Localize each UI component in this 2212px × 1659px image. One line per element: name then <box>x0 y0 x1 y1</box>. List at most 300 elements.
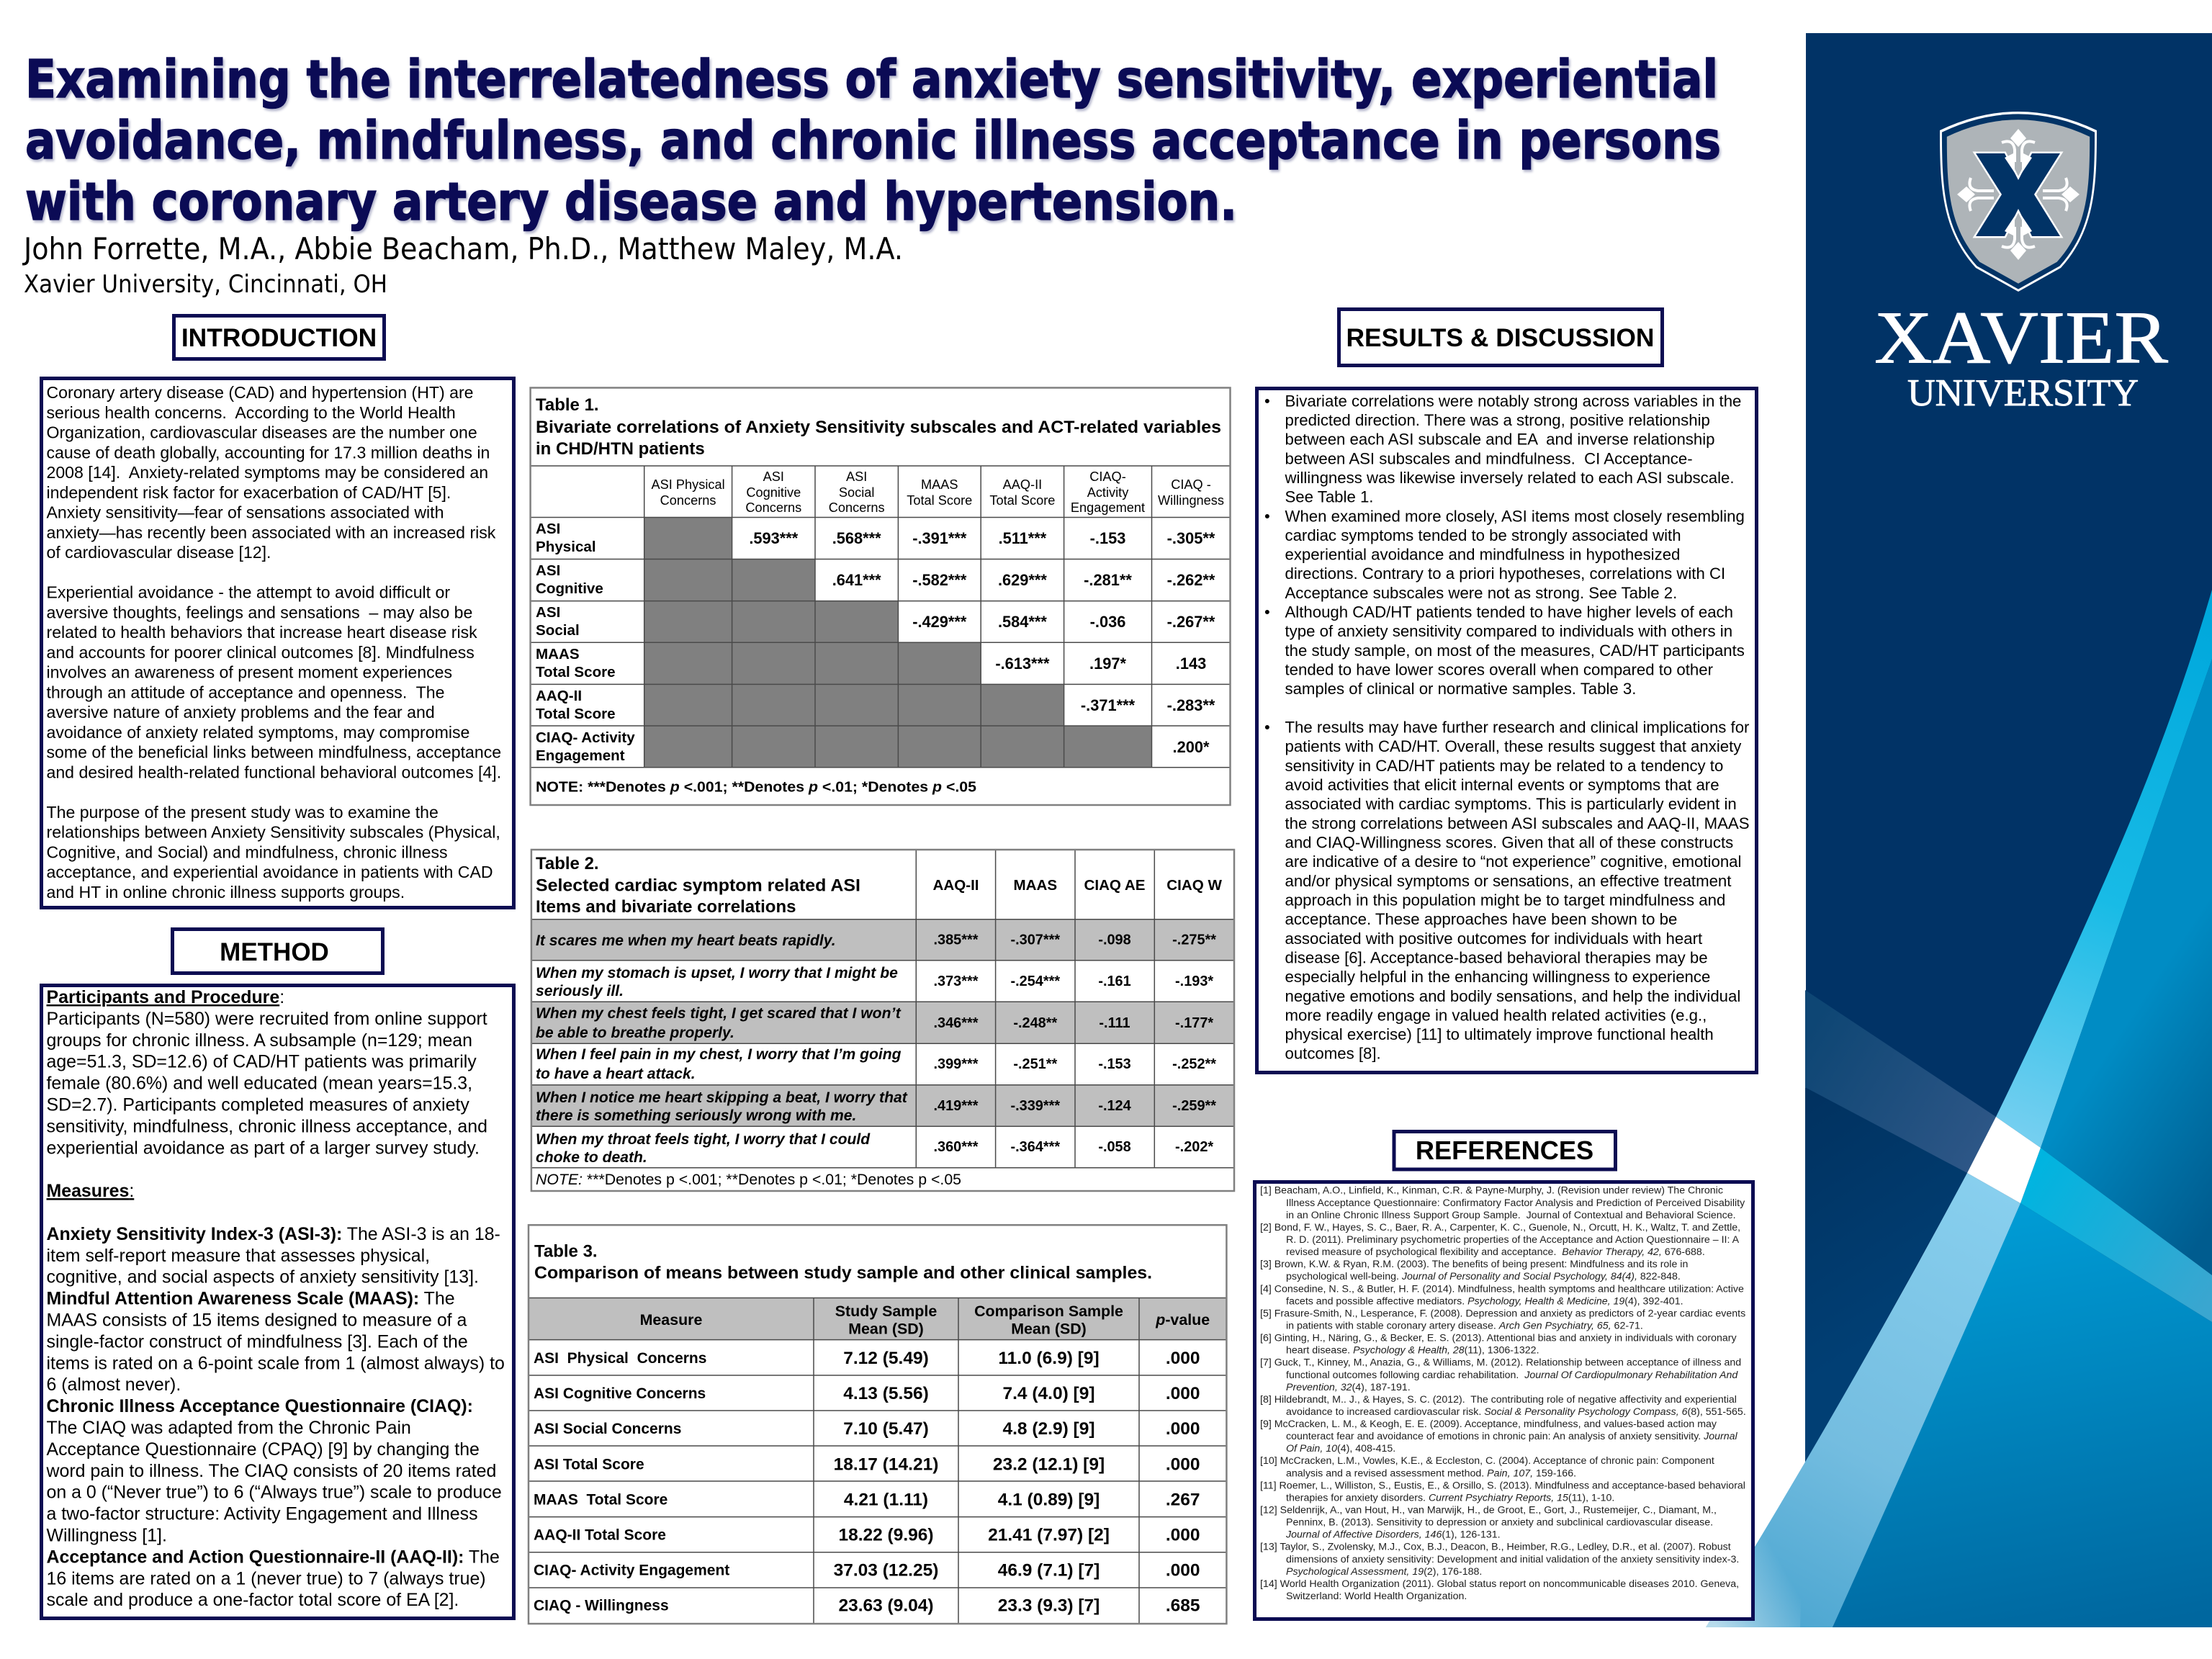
table 3 values <box>834 1349 1200 1616</box>
title: Examining the interrelatedness of anxiety sensitivity, experiential <box>25 49 1718 109</box>
panel: references: [11] Roemer, L., Williston, S., Eustis, E., & Orsillo, S. (2013). Mindfulness and acceptance-based behavioral <box>1260 1480 1745 1491</box>
table 3 values: 18.17 (14.21) <box>834 1455 938 1474</box>
table 1 row labels: Cognitive <box>536 580 603 597</box>
table 3 values: .267 <box>1166 1491 1200 1509</box>
panel: references: [9] McCracken, L. M., & Keogh, E. E. (2009). Acceptance, mindfulness, and values-based action may <box>1260 1419 1717 1430</box>
table 3 row labels: ASI Physical Concerns <box>534 1350 706 1367</box>
panel: results and discussion: • <box>1264 603 1270 621</box>
panel: results and discussion: tended to have lower scores overall when compared to other <box>1285 661 1714 679</box>
table 3 row labels: CIAQ - Willingness <box>534 1598 669 1614</box>
table 3 column headers: Study Sample <box>835 1303 937 1320</box>
panel: results and discussion: are indicative of a desire to “not experience” cognitive, emotional <box>1285 853 1741 871</box>
table 1 values: -.391*** <box>912 529 967 547</box>
table 1 values: .584*** <box>998 613 1047 631</box>
table 1 values: -.281** <box>1084 571 1132 589</box>
panel: method: Mindful Attention Awareness Scale (MAAS): <box>46 1289 419 1309</box>
table 2 title <box>536 854 860 917</box>
table 3 column headers: Mean (SD) <box>848 1321 924 1338</box>
table 1 values: .593*** <box>749 529 799 547</box>
table 1 note: NOTE: ***Denotes p <.001; **Denotes p <.01; *Denotes p <.05 <box>536 779 976 795</box>
panel: results and discussion: When examined more closely, ASI items most closely resembling <box>1285 507 1745 525</box>
table 1 values: -.305** <box>1167 529 1215 547</box>
table 2 column headers: CIAQ AE <box>1084 877 1146 894</box>
panel: results and discussion: Although CAD/HT patients tended to have higher levels of each <box>1285 603 1733 621</box>
heading: introduction: INTRODUCTION <box>181 323 377 352</box>
panel: method: Participants (N=580) were recruited from online support <box>46 1009 487 1029</box>
table 3 title: Table 3. <box>534 1241 598 1262</box>
panel: results and discussion: type of anxiety sensitivity compared to individuals with others in <box>1285 622 1732 640</box>
table 2 values: -.252** <box>1172 1056 1216 1072</box>
table 3 values: .000 <box>1166 1525 1200 1545</box>
panel: method: Acceptance and Action Questionnaire-II (AAQ-II): <box>46 1547 464 1567</box>
panel: results and discussion: experiential avoidance and mindfulness in hypothesized <box>1285 546 1680 564</box>
panel: references: [13] Taylor, S., Zvolensky, M.J., Cox, B.J., Deacon, B., Heimber, R.G., Ledley, D.R., et al. (2007). Robust <box>1260 1542 1731 1553</box>
table 1 values <box>749 529 1215 756</box>
table 3 values: 46.9 (7.1) [7] <box>998 1561 1100 1581</box>
panel: results and discussion: more readily engage in valued health related activities (e.g., <box>1285 1006 1707 1024</box>
table 3 values: 7.4 (4.0) [9] <box>1002 1384 1094 1403</box>
table 3 row labels: AAQ-II Total Score <box>534 1527 666 1544</box>
table 3 values: 23.2 (12.1) [9] <box>993 1455 1105 1474</box>
logo wordmark: XAVIER: XAVIER <box>1874 297 2169 379</box>
panel: references: [12] Seldenrijk, A., van Hout, H., van Marwijk, H., de Groot, E., Gort, J., Rustemeijer, C., Diamant, M., <box>1260 1505 1717 1516</box>
table 1 column headers: Social <box>839 485 874 500</box>
table 1 values: .568*** <box>832 529 881 547</box>
panel: method: 16 items are rated on a 1 (never true) to 7 (always true) <box>46 1568 486 1588</box>
panel: results and discussion: especially helpful in the enhancing willingness to experience <box>1285 968 1710 986</box>
panel: introduction: acceptance, and experiential avoidance in patients with CAD <box>46 863 493 881</box>
table 3 values: 11.0 (6.9) [9] <box>998 1349 1100 1368</box>
table 1 column headers: Concerns <box>745 500 801 515</box>
table 2 values: -.364*** <box>1011 1139 1060 1155</box>
table 3 values: 7.10 (5.47) <box>843 1419 929 1439</box>
heading: method <box>173 929 383 974</box>
panel: references: functional outcomes following cardiac rehabilitation. Journal Of Cardiopulmonary Rehabilitation And <box>1286 1370 1737 1381</box>
table 2 column headers: MAAS <box>1013 877 1057 894</box>
table 1 values: -.429*** <box>912 613 967 631</box>
table 1 row labels: Social <box>536 622 580 639</box>
panel: method: The <box>464 1547 500 1567</box>
table 2 title: Selected cardiac symptom related ASI <box>536 876 860 896</box>
panel: results and discussion: negative emotions and bodily sensations, and help the individual <box>1285 987 1740 1005</box>
table 2 column headers <box>932 877 1222 894</box>
panel: introduction: The purpose of the present study was to examine the <box>46 803 439 822</box>
panel: references: revised measure of psychological flexibility and acceptance. Behavior Therapy, 42, 676-688. <box>1286 1246 1705 1258</box>
authors: John Forrette, M.A., Abbie Beacham, Ph.D., Matthew Maley, M.A. <box>22 231 903 266</box>
table 1 column headers: Willingness <box>1158 493 1224 508</box>
panel: results and discussion: the strong correlations between ASI subscales and AAQ-II, MAAS <box>1285 814 1750 832</box>
panel: results and discussion: patients with CAD/HT. Overall, these results suggest that anxiety <box>1285 737 1742 755</box>
panel: results and discussion: cardiac symptoms tended to be strongly associated with <box>1285 526 1681 544</box>
panel: introduction: and accounts for poorer clinical outcomes [8]. Mindfulness <box>46 643 475 662</box>
panel: references: [6] Ginting, H., Näring, G., & Becker, E. S. (2013). Attentional bias and anxiety in individuals with coronary <box>1260 1333 1737 1344</box>
panel: method: The <box>419 1289 455 1309</box>
table 1 values: -.262** <box>1167 571 1215 589</box>
panel: references: Penninx, B. (2013). Sensitivity to depression or anxiety and subclinical cardiovascular disease. <box>1286 1517 1713 1529</box>
panel: references: dimensions of anxiety sensitivity: Development and initial validation of the anxiety sensitivity index-3. <box>1286 1554 1739 1565</box>
panel: references: [4] Consedine, N. S., & Butler, H. F. (2014). Mindfulness, health symptoms and healthcare utilization: Active <box>1260 1283 1744 1295</box>
table 3 values: 23.63 (9.04) <box>838 1596 934 1616</box>
panel: results and discussion: associated with positive outcomes for individuals with heart <box>1285 930 1702 948</box>
table 1 row labels: Total Score <box>536 664 616 680</box>
panel: method: experiential avoidance as part of a larger survey study. <box>46 1138 480 1158</box>
panel: references: R. D. (2011). Preliminary psychometric properties of the Acceptance and Action Questionnaire – II: A <box>1286 1234 1740 1246</box>
panel: introduction: Experiential avoidance - the attempt to avoid difficult or <box>46 583 450 602</box>
panel: references: avoidance to increased cardiovascular risk. Social & Personality Psychology Compass, 6(8), 551-565. <box>1286 1406 1746 1418</box>
panel: introduction <box>42 379 514 907</box>
table 2 items: seriously ill. <box>536 983 624 999</box>
heading: references <box>1394 1132 1616 1169</box>
panel: references: [5] Frasure-Smith, N., Lesperance, F. (2008). Depression and anxiety as predictors of 2-year cardiac events <box>1260 1308 1745 1319</box>
panel: method: SD=2.7). Participants completed measures of anxiety <box>46 1094 469 1115</box>
panel: references: [1] Beacham, A.O., Linfield, K., Kinman, C.R. & Payne-Murphy, J. (Revision under review) The Chronic <box>1260 1185 1723 1197</box>
table 3 column headers: p-value <box>1155 1311 1210 1328</box>
table 2 values: -.193* <box>1175 974 1213 989</box>
panel: results and discussion: between each ASI subscale and EA and inverse relationship <box>1285 431 1715 449</box>
panel: method: age=51.3, SD=12.6) of CAD/HT patients was primarily <box>46 1052 477 1072</box>
table 1 row labels: Physical <box>536 539 596 555</box>
panel: method: scale and produce a one-factor total score of EA [2]. <box>46 1590 459 1610</box>
panel: results and discussion: The results may have further research and clinical implications for <box>1285 719 1750 737</box>
panel: references: [2] Bond, F. W., Hayes, S. C., Baer, R. A., Carpenter, K. C., Guenole, N., Orcutt, H. K., Waltz, T. and Zettle, <box>1260 1222 1740 1233</box>
right brand panel <box>1706 33 2212 1627</box>
table 2 values: -.124 <box>1098 1098 1131 1114</box>
table 2 values: -.275** <box>1172 932 1216 948</box>
heading: results and discussion: RESULTS & DISCUSSION <box>1346 323 1655 352</box>
panel: results and discussion: the study sample, on most of the measures, CAD/HT participants <box>1285 642 1745 660</box>
panel: introduction: Anxiety sensitivity—fear of sensations associated with <box>46 503 444 522</box>
panel: results and discussion: samples of clinical or normative samples. Table 3. <box>1285 680 1636 698</box>
affiliation: Xavier University, Cincinnati, OH <box>24 270 387 299</box>
table 2 values: .385*** <box>934 932 979 948</box>
table 2 values: -.307*** <box>1011 932 1060 948</box>
panel: introduction: Organization, cardiovascular diseases are the number one <box>46 423 477 442</box>
panel: introduction: of cardiovascular disease [12]. <box>46 543 271 562</box>
table 3: comparison of means <box>529 1225 1226 1624</box>
panel: results and discussion: • <box>1264 507 1270 525</box>
table 1 title <box>536 395 1221 459</box>
table 3 values: .685 <box>1166 1596 1200 1616</box>
table 1 row labels: CIAQ- Activity <box>536 729 635 746</box>
table 2 title: Items and bivariate correlations <box>536 897 796 917</box>
table 2 column headers: AAQ-II <box>932 877 979 894</box>
panel: references: heart disease. Psychology & Health, 28(11), 1306-1322. <box>1286 1345 1539 1357</box>
panel: results and discussion: and CIAQ-Willingness scores. Given that all of these constructs <box>1285 833 1733 851</box>
panel: results and discussion: avoid activities that elicit internal events or symptoms that are <box>1285 776 1719 793</box>
panel: results and discussion: directions. Contrary to a priori hypotheses, correlations with CI <box>1285 565 1725 583</box>
panel: method: : <box>279 987 284 1007</box>
panel: introduction: involves an awareness of present moment experiences <box>46 663 452 682</box>
panel: results and discussion: • <box>1264 392 1270 410</box>
table 1 title: Table 1. <box>536 395 599 415</box>
table 2 values: -.058 <box>1098 1139 1131 1155</box>
panel: references: analysis and a revised assessment method. Pain, 107, 159-166. <box>1286 1467 1576 1479</box>
panel: method: Chronic Illness Acceptance Questionnaire (CIAQ): <box>46 1396 473 1416</box>
panel: method: MAAS consists of 15 items designed to measure of a <box>46 1310 467 1331</box>
panel: method: The CIAQ was adapted from the Chronic Pain <box>46 1418 411 1438</box>
table 2 items: When I notice me heart skipping a beat, I worry that <box>536 1089 908 1106</box>
panel: method: 6 (almost never). <box>46 1375 181 1395</box>
title: with coronary artery disease and hypertension. <box>25 171 1237 232</box>
table 3 values: 18.22 (9.96) <box>838 1525 934 1545</box>
panel: method: Anxiety Sensitivity Index-3 (ASI-3): <box>46 1224 342 1244</box>
table 1 title: in CHD/HTN patients <box>536 439 705 459</box>
panel: method: Willingness [1]. <box>46 1525 167 1545</box>
panel: references: Journal of Affective Disorders, 146(1), 126-131. <box>1286 1529 1501 1541</box>
panel: results and discussion: approach in this population might be to target mindfulness and <box>1285 891 1725 909</box>
panel: results and discussion <box>1257 389 1757 1073</box>
panel: method: : <box>129 1181 134 1201</box>
table 2 column headers: CIAQ W <box>1166 877 1222 894</box>
table 1 values: -.267** <box>1167 613 1215 631</box>
panel: results and discussion: • <box>1264 719 1270 737</box>
table 3 values: 21.41 (7.97) [2] <box>988 1525 1110 1545</box>
table 1 title: Bivariate correlations of Anxiety Sensitivity subscales and ACT-related variables <box>536 418 1221 437</box>
table 1 values: .200* <box>1173 738 1210 756</box>
title <box>25 49 1721 232</box>
table 3 row labels: ASI Total Score <box>534 1456 644 1473</box>
panel: results and discussion: predicted direction. There was a strong, positive relationship <box>1285 411 1710 429</box>
panel: references: [3] Brown, K.W. & Ryan, R.M. (2003). The benefits of being present: Mindfulness and its role in <box>1260 1259 1688 1270</box>
table 1 values: .197* <box>1089 655 1126 673</box>
table 3 values: 23.3 (9.3) [7] <box>998 1596 1100 1616</box>
panel: references: [8] Hildebrandt, M.. J., & Hayes, S. C. (2012). The contributing role of negative affectivity and experiential <box>1260 1394 1737 1406</box>
table 1 values: .641*** <box>832 571 881 589</box>
table 1 row labels: MAAS <box>536 646 580 662</box>
table 1 column headers: Total Score <box>907 493 972 508</box>
table 2 values: -.254*** <box>1011 974 1060 989</box>
table 1 column headers: ASI <box>846 469 867 484</box>
table 2 values: .346*** <box>934 1015 979 1031</box>
panel: method: female (80.6%) and well educated (mean years=15.3, <box>46 1074 472 1094</box>
panel: method: a two-factor structure: Activity Engagement and Illness <box>46 1504 478 1524</box>
panel: results and discussion: See Table 1. <box>1285 488 1373 506</box>
panel: results and discussion: acceptance. These approaches have been shown to be <box>1285 910 1677 928</box>
table 2 items: be able to breathe properly. <box>536 1025 734 1041</box>
table 3 column headers: Measure <box>640 1311 703 1328</box>
panel: results and discussion: between ASI subscales and mindfulness. CI Acceptance- <box>1285 449 1693 467</box>
panel: method: on a 0 (“Never true”) to 6 (“Always true”) scale to produce <box>46 1483 502 1503</box>
table 2: cardiac symptom items <box>531 850 1234 1191</box>
table 3 column headers <box>640 1303 1210 1338</box>
panel: introduction: some of the beneficial links between mindfulness, acceptance <box>46 743 501 762</box>
panel: results and discussion: disease [6]. Acceptance-based behavioral therapies may be <box>1285 948 1708 966</box>
panel: method: groups for chronic illness. A subsample (n=129; mean <box>46 1030 472 1051</box>
panel: references <box>1254 1182 1753 1619</box>
table 2 items: choke to death. <box>536 1149 647 1166</box>
table 1 column headers: Engagement <box>1071 500 1145 515</box>
panel: introduction: through an attitude of acceptance and openness. The <box>46 683 444 701</box>
panel: results and discussion: outcomes [8]. <box>1285 1045 1381 1063</box>
table 1 column headers: CIAQ- <box>1089 469 1126 484</box>
table 1 row labels: Total Score <box>536 706 616 722</box>
panel: method: Measures <box>46 1181 129 1201</box>
panel: introduction: 2008 [14]. Anxiety-related symptoms may be considered an <box>46 463 488 482</box>
panel: references: Switzerland: World Health Organization. <box>1286 1591 1467 1602</box>
panel: introduction: Coronary artery disease (CAD) and hypertension (HT) are <box>46 383 473 402</box>
table 2 values: -.248** <box>1013 1015 1057 1031</box>
table 1 values: -.036 <box>1090 613 1125 631</box>
table 1 row labels <box>536 521 635 764</box>
table 1 values: -.283** <box>1167 696 1215 714</box>
table 3 values: 4.8 (2.9) [9] <box>1002 1419 1094 1439</box>
panel: results and discussion: willingness was likewise inversely related to each ASI subscale. <box>1285 469 1735 487</box>
panel: introduction: and HT in online chronic illness supports groups. <box>46 883 405 902</box>
panel: method: Acceptance Questionnaire (CPAQ) [9] by changing the <box>46 1439 480 1460</box>
table 1 row labels: ASI <box>536 521 560 537</box>
table 3 values: .000 <box>1166 1419 1200 1439</box>
table 3 title: Comparison of means between study sample and other clinical samples. <box>534 1263 1152 1283</box>
panel: references: Illness Acceptance Questionnaire: Confirmatory Factor Analysis and Prediction of Perceived Disability <box>1286 1197 1745 1209</box>
table 2 items: When I feel pain in my chest, I worry that I’m going <box>536 1046 902 1063</box>
panel: results and discussion: Acceptance subscales were not as strong. See Table 2. <box>1285 584 1677 602</box>
table 2 values: -.339*** <box>1011 1098 1060 1114</box>
table 2 items: It scares me when my heart beats rapidly. <box>536 932 836 949</box>
panel: introduction: relationships between Anxiety Sensitivity subscales (Physical, <box>46 823 500 842</box>
table 1 values: -.582*** <box>912 571 967 589</box>
table 1 row labels: AAQ-II <box>536 688 582 704</box>
heading: references: REFERENCES <box>1416 1136 1593 1165</box>
panel: introduction: aversive thoughts, feelings and sensations – may also be <box>46 603 472 621</box>
panel: references: therapies for anxiety disorders. Current Psychiatry Reports, 15(11), 1-10. <box>1286 1492 1614 1503</box>
panel: introduction: aversive nature of anxiety problems and the fear and <box>46 703 435 721</box>
table 2 values: -.098 <box>1098 932 1131 948</box>
panel: introduction: serious health concerns. According to the World Health <box>46 403 456 422</box>
table 3 row labels <box>534 1350 729 1614</box>
panel: introduction: independent risk factor for exacerbation of CAD/HT [5]. <box>46 483 451 502</box>
table 2 items: When my throat feels tight, I worry that I could <box>536 1131 871 1148</box>
table 1 values: .511*** <box>999 529 1047 547</box>
table 2 items <box>536 932 908 1166</box>
table 2 values: -.251** <box>1013 1056 1057 1072</box>
table 1 row labels: Engagement <box>536 747 625 764</box>
table 2 values: .419*** <box>934 1098 979 1114</box>
table 2 values: -.153 <box>1098 1056 1131 1072</box>
table 1 column headers <box>652 469 1224 515</box>
table 2 title: Table 2. <box>536 854 599 873</box>
table 2 values: -.259** <box>1172 1098 1216 1114</box>
table 2 values: -.111 <box>1099 1015 1130 1031</box>
table 3 values: 4.21 (1.11) <box>844 1491 928 1509</box>
table 1 column headers: Activity <box>1087 485 1129 500</box>
panel: introduction: related to health behaviors that increase heart disease risk <box>46 623 477 642</box>
title: avoidance, mindfulness, and chronic illness acceptance in persons <box>25 110 1721 171</box>
table 3 row labels: ASI Cognitive Concerns <box>534 1385 706 1402</box>
table 2 values: .399*** <box>934 1056 979 1072</box>
table 1 values: .629*** <box>998 571 1047 589</box>
table 2 values: .373*** <box>934 974 979 989</box>
panel: method: single-factor construct of mindfulness [3]. Each of the <box>46 1331 468 1352</box>
panel: method: sensitivity, mindfulness, chronic illness acceptance, and <box>46 1116 487 1136</box>
table 1 values: -.371*** <box>1081 696 1136 714</box>
table 1 column headers: MAAS <box>921 477 958 492</box>
panel: references: psychological well-being. Journal of Personality and Social Psychology, 84(4), 822-848. <box>1286 1271 1681 1282</box>
table 1 column headers: Total Score <box>989 493 1055 508</box>
logo wordmark: UNIVERSITY: UNIVERSITY <box>1907 372 2139 414</box>
panel: references: in an Online Chronic Illness Support Group Sample. Journal of Contextual and Behavioral Science. <box>1286 1210 1736 1221</box>
panel: introduction: avoidance of anxiety related symptoms, may compromise <box>46 723 469 742</box>
panel: results and discussion: associated with cardiac symptoms. This is particularly evident in <box>1285 795 1737 813</box>
table 3 values: .000 <box>1166 1561 1200 1581</box>
logo: Xavier shield <box>1940 112 2097 292</box>
table 2 items: When my stomach is upset, I worry that I might be <box>536 965 898 981</box>
table 2 values <box>934 932 1216 1155</box>
table 1 column headers: ASI <box>763 469 784 484</box>
heading: results and discussion <box>1339 310 1662 366</box>
table 2 values: -.177* <box>1175 1015 1213 1031</box>
panel: introduction: cause of death globally, accounting for 17.3 million deaths in <box>46 443 490 462</box>
panel: references: [7] Guck, T., Kinney, M., Anazia, G., & Williams, M. (2012). Relationship between acceptance of illness and <box>1260 1357 1741 1369</box>
panel: references: Psychological Assessment, 19(2), 176-188. <box>1286 1566 1482 1578</box>
table 2 items: there is something seriously wrong with me. <box>536 1107 856 1124</box>
table 2 items: When my chest feels tight, I get scared that I won’t <box>536 1005 902 1022</box>
panel: introduction: Cognitive, and Social) and mindfulness, chronic illness <box>46 842 448 861</box>
table 1 values: -.153 <box>1090 529 1125 547</box>
table 2 items: to have a heart attack. <box>536 1066 696 1082</box>
panel: method: Participants and Procedure <box>46 987 279 1007</box>
panel: results and discussion: Bivariate correlations were notably strong across variables in the <box>1285 392 1741 410</box>
panel: method: The ASI-3 is an 18- <box>342 1224 500 1244</box>
panel: method: word pain to illness. The CIAQ consists of 20 items rated <box>46 1461 496 1481</box>
table 3 values: .000 <box>1166 1349 1200 1368</box>
panel: results and discussion: physical exercise) [11] to ultimately improve functional health <box>1285 1025 1714 1043</box>
table 3 values: .000 <box>1166 1455 1200 1474</box>
table 2 note: NOTE: ***Denotes p <.001; **Denotes p <.01; *Denotes p <.05 <box>536 1172 961 1188</box>
table 3 values: 37.03 (12.25) <box>834 1561 938 1581</box>
table 1 column headers: ASI Physical <box>652 477 725 492</box>
panel: method: cognitive, and social aspects of anxiety sensitivity [13]. <box>46 1267 479 1287</box>
table 3 row labels: CIAQ- Activity Engagement <box>534 1563 729 1579</box>
table 3 row labels: ASI Social Concerns <box>534 1421 681 1437</box>
table 3 values: 4.1 (0.89) [9] <box>998 1491 1100 1509</box>
table 3 values: .000 <box>1166 1384 1200 1403</box>
table 1: bivariate correlations <box>531 387 1230 805</box>
panel: introduction: and desired health-related functional behavioral outcomes [4]. <box>46 763 501 781</box>
table 1 column headers: AAQ-II <box>1003 477 1042 492</box>
panel: method: item self-report measure that assesses physical, <box>46 1246 430 1266</box>
panel: introduction: anxiety—has recently been associated with an increased risk <box>46 523 496 541</box>
panel: references: in patients with stable coronary artery disease. Arch Gen Psychiatry, 65, 62-71. <box>1286 1320 1643 1331</box>
table 1 column headers: CIAQ - <box>1171 477 1211 492</box>
table 3 column headers: Mean (SD) <box>1011 1321 1087 1338</box>
heading: method: METHOD <box>220 938 329 966</box>
heading: introduction <box>174 315 385 359</box>
table 2 values: .360*** <box>934 1139 979 1155</box>
table 1 row labels: ASI <box>536 604 560 621</box>
table 1 values: -.613*** <box>995 655 1050 673</box>
panel: references: [10] McCracken, L.M., Vowles, K.E., & Eccleston, C. (2004). Acceptance of chronic pain: Component <box>1260 1455 1714 1467</box>
table 3 values: 4.13 (5.56) <box>843 1384 929 1403</box>
table 1 row labels: ASI <box>536 562 560 579</box>
panel: references: [14] World Health Organization (2011). Global status report on noncommunicable diseases 2010. Geneva, <box>1260 1578 1739 1590</box>
panel: references: facets and possible affective mediators. Psychology, Health & Medicine, 19(4), 392-401. <box>1286 1295 1683 1307</box>
panel: references: counteract fear and avoidance of emotions in chronic pain: An analysis of anxiety sensitivity. Journal <box>1286 1431 1737 1442</box>
table 2 values: -.161 <box>1098 974 1131 989</box>
table 1 column headers: Concerns <box>829 500 885 515</box>
table 3 title <box>534 1241 1152 1283</box>
table 3 column headers: Comparison Sample <box>974 1303 1123 1320</box>
table 3 values: 7.12 (5.49) <box>843 1349 929 1368</box>
panel: references: Of Pain, 10(4), 408-415. <box>1286 1443 1395 1455</box>
panel: references: Prevention, 32(4), 187-191. <box>1286 1382 1411 1393</box>
panel: method: items is rated on a 6-point scale from 1 (almost always) to <box>46 1353 505 1373</box>
table 1 column headers: Cognitive <box>746 485 801 500</box>
table 1 column headers: Concerns <box>660 493 716 508</box>
table 1 values: .143 <box>1176 655 1206 673</box>
panel: results and discussion: sensitivity in CAD/HT patients may be related to a tendency to <box>1285 757 1723 775</box>
table 3 row labels: MAAS Total Score <box>534 1492 667 1508</box>
panel: results and discussion: and/or physical symptoms or sensations, an effective treatment <box>1285 872 1731 890</box>
